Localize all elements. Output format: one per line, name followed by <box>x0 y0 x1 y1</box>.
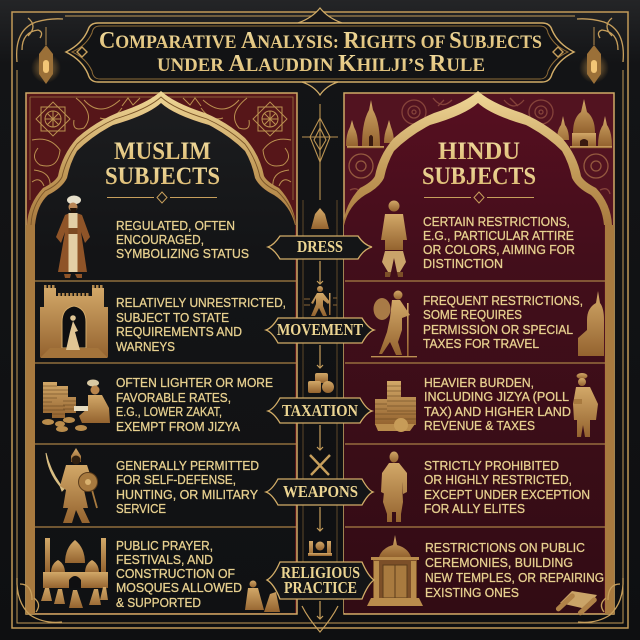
heading: hindu subjects <box>422 138 536 190</box>
bottom right corner flourish <box>578 578 623 622</box>
text: hindu religious practice: NEW TEMPLES, OR REPAIRING <box>425 570 604 585</box>
center icon: coins <box>308 373 334 393</box>
label: movement <box>266 318 374 343</box>
text: muslim movement: SUBJECT TO STATE <box>116 310 229 325</box>
text: muslim movement: WARNEYS <box>116 339 175 354</box>
icon: mosque with worshippers <box>41 538 108 608</box>
icon: hindu dress figure <box>381 200 407 277</box>
text: muslim weapons <box>116 458 259 516</box>
text: hindu dress: DISTINCTION <box>423 256 503 271</box>
arch interior <box>35 103 295 613</box>
row dividers <box>35 281 296 527</box>
text: muslim weapons: FOR SELF-DEFENSE, <box>116 472 236 487</box>
text: muslim taxation: FAVORABLE RATES, <box>116 390 231 405</box>
text: muslim taxation: EXEMPT FROM JIZYA <box>116 419 240 434</box>
arch gold band <box>27 91 296 225</box>
temple skyline right <box>557 99 612 148</box>
arrow: movement to taxation <box>317 345 323 368</box>
label: religious practice: PRACTICE <box>284 578 357 597</box>
label: religious practice <box>267 562 374 599</box>
icon: coins and scribe <box>42 380 110 432</box>
arch gold band <box>343 91 612 225</box>
arrow: dress to movement <box>317 261 323 284</box>
text: hindu weapons: FOR ALLY ELITES <box>424 501 525 516</box>
text: hindu taxation: TAX) AND HIGHER LAND <box>424 404 571 419</box>
title plate diamonds <box>77 47 563 57</box>
heading ornament <box>107 192 217 203</box>
text: hindu movement <box>423 293 583 351</box>
bottom left corner flourish <box>17 578 62 622</box>
center icon: shrine <box>308 541 332 556</box>
text: muslim dress <box>116 218 249 261</box>
icon: warrior <box>46 448 98 523</box>
arch interior <box>344 103 604 613</box>
text: muslim religious practice: FESTIVALS, AND <box>116 552 213 567</box>
center icon: walking person <box>304 286 337 316</box>
label: taxation: TAXATION <box>282 401 359 420</box>
text: muslim movement <box>116 295 286 354</box>
panel: muslim subjects <box>26 91 297 614</box>
text: hindu dress <box>423 214 575 271</box>
text: hindu taxation: REVENUE & TAXES <box>424 418 535 433</box>
text: muslim weapons: SERVICE <box>116 501 166 516</box>
text: muslim weapons: GENERALLY PERMITTED <box>116 458 259 473</box>
text: muslim taxation <box>116 375 273 434</box>
top center finial <box>298 8 342 23</box>
label: dress: DRESS <box>297 237 343 256</box>
text: hindu taxation: HEAVIER BURDEN, <box>424 375 534 390</box>
text: hindu dress: OR COLORS, AIMING FOR <box>423 242 575 257</box>
title <box>99 28 542 77</box>
heading: muslim subjects <box>105 138 220 190</box>
icon: tax collector <box>573 373 598 437</box>
heading: muslim subjects: SUBJECTS <box>105 163 220 190</box>
text: muslim religious practice: PUBLIC PRAYER, <box>116 538 213 553</box>
heading: hindu subjects: HINDU <box>438 138 520 165</box>
text: hindu religious practice <box>425 540 604 600</box>
top right corner flourish <box>577 18 623 62</box>
right pillar band <box>605 225 614 614</box>
text: hindu weapons: STRICTLY PROHIBITED <box>424 458 559 473</box>
right lantern <box>579 27 609 84</box>
label: weapons: WEAPONS <box>283 482 358 501</box>
text: hindu religious practice: CEREMONIES, BUILDING <box>425 555 573 570</box>
label: taxation <box>268 398 372 423</box>
heading ornament <box>424 192 534 203</box>
arrow: weapons to religious practice <box>317 507 323 531</box>
text: muslim weapons: HUNTING, OR MILITARY <box>116 487 258 502</box>
text: hindu taxation <box>424 375 571 433</box>
temple skyline left <box>346 100 394 148</box>
text: hindu movement: TAXES FOR TRAVEL <box>423 336 539 351</box>
label: religious practice: RELIGIOUS <box>281 563 360 582</box>
text: hindu religious practice: RESTRICTIONS ON PUBLIC <box>425 540 585 555</box>
heading: hindu subjects: SUBJECTS <box>422 163 536 190</box>
label: dress <box>268 236 372 259</box>
panel: hindu subjects <box>343 91 614 614</box>
title: UNDER ALAUDDIN KHILJI’S RULE <box>157 51 485 77</box>
text: muslim dress: SYMBOLIZING STATUS <box>116 246 249 261</box>
icon: traveller with sack <box>371 290 417 358</box>
text: hindu religious practice: EXISTING ONES <box>425 585 519 600</box>
text: muslim dress: ENCOURAGED, <box>116 232 204 247</box>
text: hindu taxation: INCLUDING JIZYA (POLL <box>424 389 569 404</box>
top left corner flourish <box>17 18 63 62</box>
text: hindu movement: FREQUENT RESTRICTIONS, <box>423 293 583 308</box>
text: muslim taxation: OFTEN LIGHTER OR MORE <box>116 375 273 390</box>
text: hindu weapons: OR HIGHLY RESTRICTED, <box>424 472 572 487</box>
rosettes <box>349 98 610 194</box>
text: muslim taxation: E.G., LOWER ZAKAT, <box>116 404 222 419</box>
icon: small temple <box>578 291 604 356</box>
icon: two seated figures <box>245 580 280 612</box>
heading: muslim subjects: MUSLIM <box>114 138 211 165</box>
icon: hindu coins <box>375 381 416 432</box>
icon: scroll <box>555 591 598 616</box>
text: hindu weapons <box>424 458 590 516</box>
label: movement: MOVEMENT <box>277 320 364 339</box>
center icon: crossed swords <box>310 455 330 475</box>
text: muslim religious practice: CONSTRUCTION OF <box>116 566 235 581</box>
center top ornament <box>302 104 338 200</box>
text: muslim movement: RELATIVELY UNRESTRICTED, <box>116 295 286 310</box>
text: muslim religious practice: & SUPPORTED <box>116 595 201 610</box>
text: muslim religious practice: MOSQUES ALLOWED <box>116 580 242 595</box>
icon: temple door <box>367 535 423 606</box>
islamic lattice pattern <box>30 97 293 200</box>
title plate <box>66 23 574 82</box>
center icon: robe <box>311 208 329 229</box>
text: hindu movement: SOME REQUIRES <box>423 307 522 322</box>
title bottom finial <box>302 82 338 95</box>
left pillar band <box>26 225 35 614</box>
text: hindu dress: CERTAIN RESTRICTIONS, <box>423 214 570 229</box>
text: muslim dress: REGULATED, OFTEN <box>116 218 235 233</box>
row dividers <box>345 281 605 527</box>
title: COMPARATIVE ANALYSIS: RIGHTS OF SUBJECTS <box>99 28 542 54</box>
left lantern <box>31 27 61 84</box>
text: muslim movement: REQUIREMENTS AND <box>116 324 242 339</box>
arrow: bottom chevron <box>302 601 338 632</box>
icon: city gate <box>40 286 108 358</box>
icon: muslim dress figure <box>56 196 90 278</box>
text: hindu dress: E.G., PARTICULAR ATTIRE <box>423 228 574 243</box>
text: muslim religious practice <box>116 538 242 610</box>
text: hindu weapons: EXCEPT UNDER EXCEPTION <box>424 487 590 502</box>
icon: hindu bare figure <box>381 452 407 522</box>
label: weapons <box>266 479 373 505</box>
arrow: taxation to weapons <box>317 425 323 450</box>
text: hindu movement: PERMISSION OR SPECIAL <box>423 322 573 337</box>
